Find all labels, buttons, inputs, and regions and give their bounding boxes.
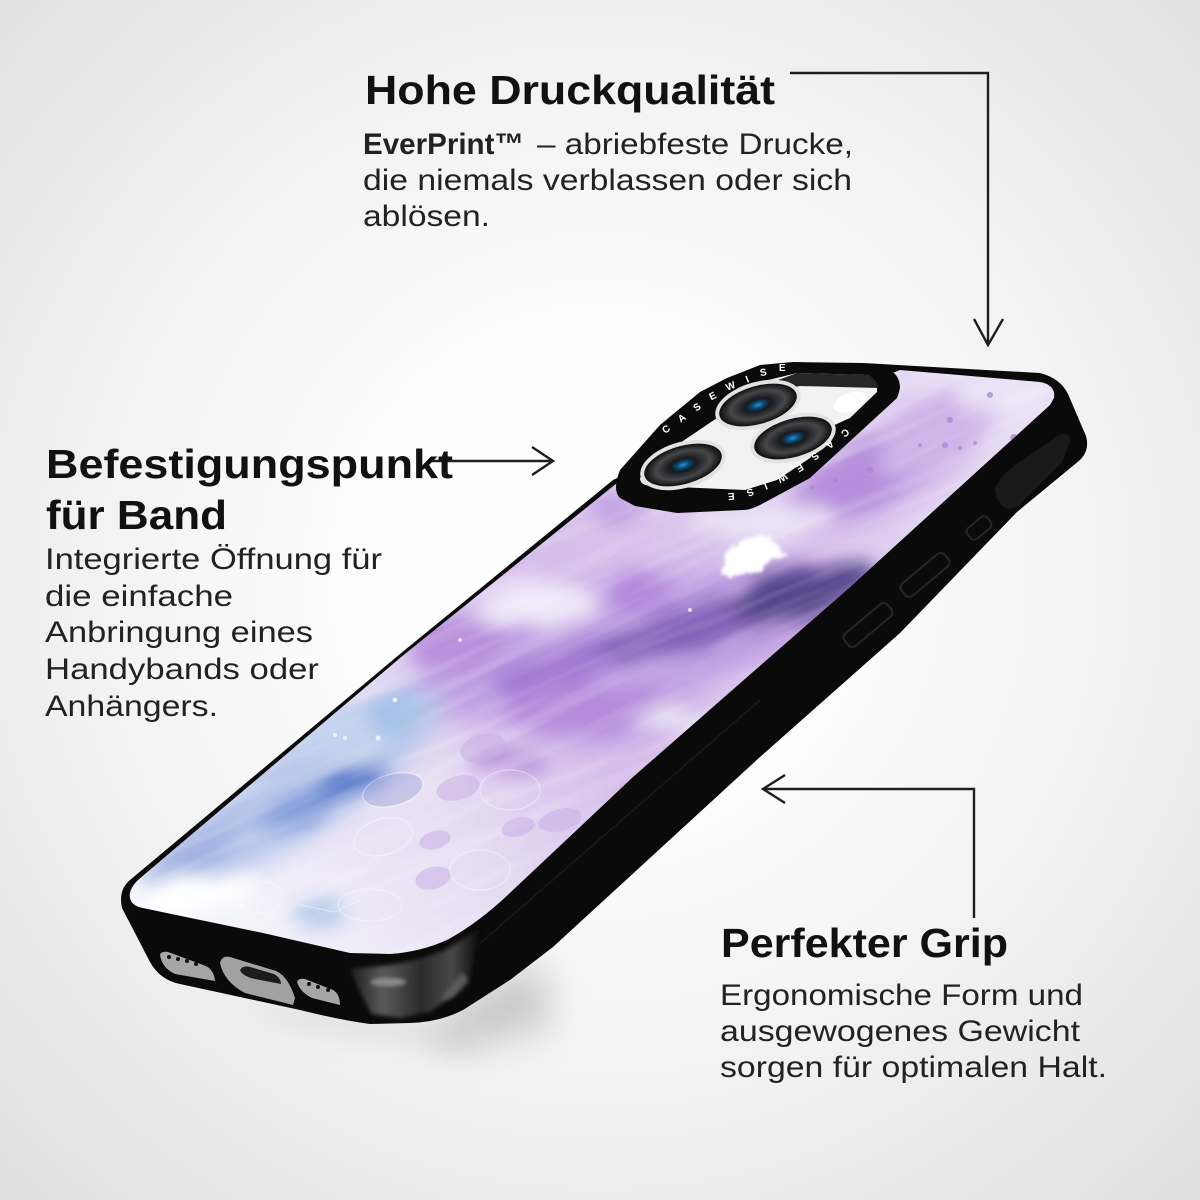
upper wash bbox=[590, 367, 1055, 536]
bump lettering: CASEWISE bbox=[662, 364, 786, 433]
white bloom bbox=[725, 538, 785, 575]
watercolor back print bbox=[130, 370, 1054, 954]
side seam bbox=[478, 700, 760, 945]
heading: Befestigungspunkt für Band: Befestigungspunkt bbox=[46, 441, 453, 487]
text: strap description: Handybands oder bbox=[45, 653, 319, 686]
paint specks bbox=[810, 392, 1018, 489]
text: EverPrint description: EverPrint™ bbox=[363, 128, 524, 161]
text: EverPrint description: ablösen. bbox=[363, 200, 490, 233]
streaky wash texture bbox=[174, 373, 962, 952]
case body bbox=[121, 363, 1087, 1024]
text: strap description bbox=[45, 543, 382, 723]
text: strap description: die einfache bbox=[45, 580, 233, 613]
lilac bubbles bbox=[300, 734, 582, 922]
camera bump bbox=[616, 362, 900, 513]
side relief bbox=[995, 434, 1070, 509]
text: EverPrint description bbox=[363, 128, 853, 233]
text: grip description bbox=[720, 979, 1107, 1084]
soft purple and blue underlayer bbox=[150, 395, 983, 884]
arrow: print quality bbox=[790, 73, 1003, 345]
phone case bbox=[121, 363, 1087, 1024]
text: grip description: sorgen für optimalen Halt. bbox=[720, 1051, 1107, 1084]
bump lettering bbox=[662, 364, 849, 500]
purple band bbox=[405, 553, 878, 778]
bump frame bbox=[616, 362, 900, 513]
blue wash bbox=[133, 692, 423, 934]
text: EverPrint description: die niemals verblassen oder sich bbox=[363, 164, 852, 197]
heading: Hohe Druckqualität: Hohe Druckqualität bbox=[365, 67, 775, 113]
charging port bbox=[220, 957, 295, 1005]
text: grip description: Ergonomische Form und bbox=[720, 979, 1083, 1012]
text: strap description: Integrierte Öffnung für bbox=[45, 543, 382, 576]
lens top bbox=[709, 371, 807, 439]
heading: Befestigungspunkt für Band: für Band bbox=[46, 492, 227, 538]
arrow: grip bbox=[763, 775, 974, 918]
bump lettering: CASEWISE bbox=[728, 430, 849, 500]
text: strap description: Anbringung eines bbox=[45, 616, 313, 649]
heading: Befestigungspunkt für Band bbox=[46, 441, 453, 538]
text: grip description: ausgewogenes Gewicht bbox=[720, 1015, 1081, 1048]
speaker left bbox=[160, 952, 215, 981]
text: EverPrint description: – abriebfeste Drucke, bbox=[537, 128, 853, 161]
lens left bbox=[634, 431, 732, 499]
heading: Perfekter Grip: Perfekter Grip bbox=[721, 920, 1008, 966]
speaker right bbox=[297, 979, 340, 1005]
arrow: strap attachment bbox=[430, 447, 553, 475]
flash bbox=[831, 387, 869, 417]
side buttons bbox=[841, 514, 993, 649]
white specks bbox=[333, 608, 692, 740]
bump opening bbox=[640, 373, 877, 490]
lens right bbox=[744, 404, 842, 472]
phone shadow bbox=[230, 960, 550, 1050]
bottom corner gloss bbox=[350, 928, 480, 1018]
text: strap description: Anhängers. bbox=[45, 690, 218, 723]
